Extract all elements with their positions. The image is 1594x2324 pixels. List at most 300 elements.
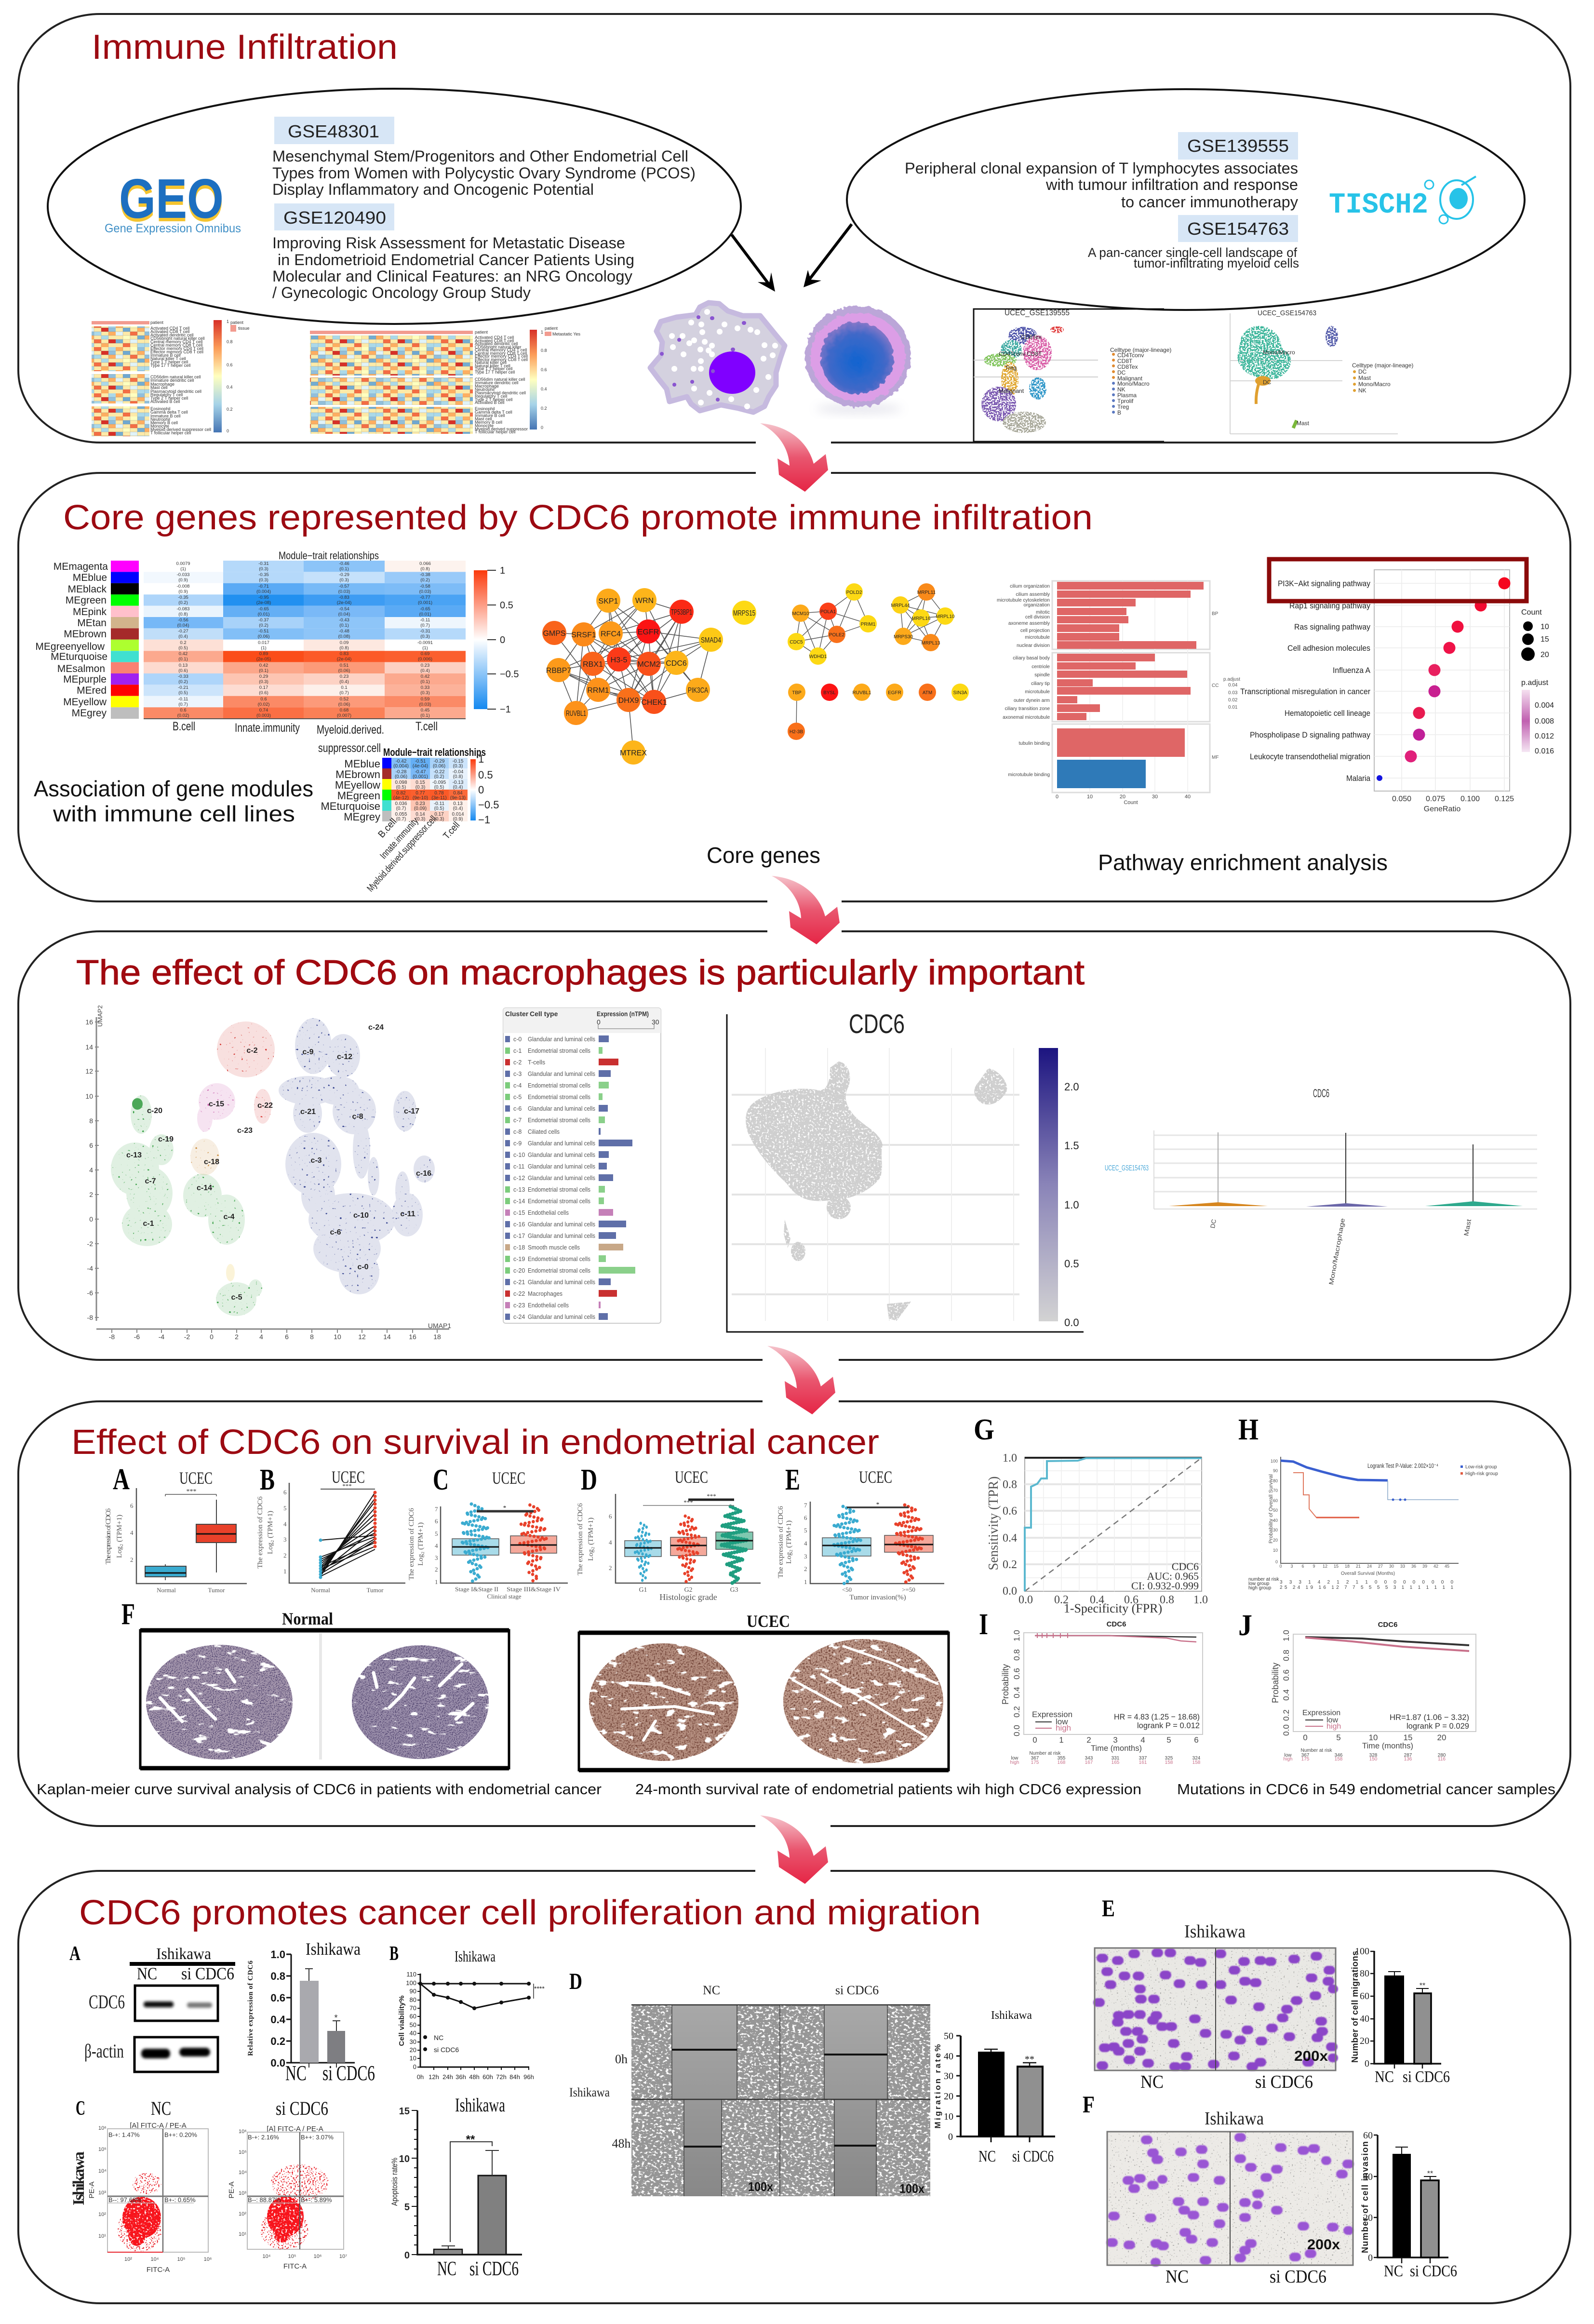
- UMAP: UCEC GSE139555: CD4Tconv: [1117, 352, 1144, 359]
- flow cytometry C: NC: [151, 2097, 171, 2119]
- flow cytometry C: 10⁵: [288, 2254, 296, 2259]
- dot plot: KEGG pathways: 10: [1540, 623, 1549, 631]
- heatmap: suppressor cell module-trait relationships: (0.09): [414, 806, 427, 811]
- bar chart: GO enrichment: cilium assembly: [1016, 592, 1050, 597]
- KM chart J: 0.2: [1282, 1709, 1291, 1721]
- flow cytometry C: 10²: [98, 2212, 106, 2217]
- heatmap: module-trait relationships: (0.8): [178, 612, 188, 617]
- bar chart: cell invasion: NC: [1384, 2262, 1403, 2280]
- network: core genes: SIN3A: [953, 690, 967, 696]
- UMAP: UCEC GSE154763: Mast: [1297, 420, 1310, 427]
- UMAP: clusters: c-3: [310, 1156, 322, 1165]
- heatmap: module-trait relationships: MEmagenta: [54, 561, 108, 572]
- bar chart: cell migrations: Number of cell migrations: [1350, 1951, 1360, 2063]
- heatmap: suppressor cell module-trait relationships: (9e-13): [450, 795, 466, 801]
- heatmap: GSE48301 immune infiltration: Type 17 T helper cell: [150, 363, 190, 368]
- dot plot: KEGG pathways: Leukocyte transendothelial migration: [1250, 752, 1370, 761]
- table: cluster cell types: c-1: [513, 1048, 522, 1054]
- bar chart: cell invasion: Number of cell invasion: [1360, 2141, 1370, 2253]
- line chart B: cell viability: 70: [410, 2004, 416, 2012]
- flow cytometry C: B++: 3.07%: [301, 2134, 334, 2141]
- dot plot: KEGG pathways: PI3K−Akt signaling pathway: [1278, 579, 1370, 588]
- dot plot: KEGG pathways: 0.008: [1535, 717, 1554, 725]
- table: cluster cell types: Glandular and luminal cells: [528, 1314, 595, 1320]
- heatmap: suppressor cell module-trait relationships: MEturquoise: [321, 800, 380, 812]
- KM chart I: 367: [1031, 1756, 1039, 1761]
- heatmap: module-trait relationships: MEblue: [73, 572, 107, 583]
- UMAP: UCEC GSE139555: Malignant: [1117, 375, 1143, 382]
- heatmap: GSE48301 immune infiltration: tissue: [238, 326, 250, 331]
- heatmap: module-trait relationships: (0.1): [420, 679, 430, 685]
- heatmap: module-trait relationships: (1): [261, 645, 267, 651]
- heatmap: GSE48301 immune infiltration: patient: [150, 320, 164, 325]
- violin plot: CDC6 by cell type: Mast: [1462, 1218, 1473, 1236]
- KM chart H: 42: [1433, 1564, 1438, 1569]
- heatmap: suppressor cell module-trait relationships: (0.7): [396, 817, 406, 822]
- heatmap: suppressor cell module-trait relationships: (9e-10): [413, 795, 428, 801]
- dataset tag GSE48301: [274, 117, 394, 144]
- arrow: panel 2 to panel 3: [767, 876, 842, 944]
- line chart B: cell viability: 96h: [523, 2073, 534, 2081]
- heatmap: GSE48301 immune infiltration: Effector memory CD4 T cell: [150, 346, 203, 351]
- bar chart: cell invasion: **: [1427, 2170, 1433, 2178]
- bar chart: GO enrichment: 40: [1185, 794, 1191, 800]
- heatmap: module-trait relationships: 0.45: [421, 708, 429, 713]
- bar chart: relative CDC6 expression: Relative expression of CDC6: [247, 1960, 255, 2056]
- flow cytometry C: 10⁶: [314, 2254, 321, 2259]
- table: cluster cell types: T-cells: [528, 1059, 545, 1066]
- heatmap: suppressor cell module-trait relationships: -0.42: [396, 759, 407, 764]
- heatmap: suppressor cell module-trait relationships: -0.095: [432, 780, 446, 785]
- flow cytometry C: si CDC6: [276, 2097, 328, 2119]
- table: cluster cell types: c-4: [513, 1082, 522, 1089]
- dot plot: KEGG pathways: [1240, 559, 1554, 813]
- flow cytometry C: 10²: [124, 2257, 132, 2262]
- bar chart: migration rate: 0: [948, 2132, 953, 2142]
- table: cluster cell types: Glandular and luminal cells: [528, 1279, 595, 1286]
- UMAP: clusters: 10: [85, 1092, 93, 1100]
- heatmap: module-trait relationships: -0.0091: [417, 640, 433, 645]
- transwell F: [1083, 2091, 1353, 2287]
- bar chart: GO enrichment: 0: [1056, 794, 1058, 800]
- heatmap: GSE120490 immune infiltration: [310, 326, 581, 434]
- heatmap: GSE120490 immune infiltration: Neutrophil: [475, 387, 495, 392]
- chart E: tumor invasion: *: [876, 1501, 879, 1508]
- heatmap: module-trait relationships: (2e-05): [256, 657, 271, 662]
- heatmap: module-trait relationships: -0.37: [258, 618, 269, 623]
- network: core genes: TBP: [792, 690, 802, 696]
- flow cytometry C: 10⁵: [239, 2149, 247, 2155]
- heatmap: module-trait relationships: MEturquoise: [51, 651, 107, 662]
- heatmap: suppressor cell module-trait relationships: (0.3): [415, 817, 425, 822]
- table: cluster cell types: c-0: [513, 1036, 522, 1043]
- heatmap: module-trait relationships: 0.17: [259, 685, 268, 690]
- bar chart: migration rate: [933, 2009, 1055, 2165]
- heatmap: module-trait relationships: (0.7): [339, 690, 349, 696]
- table: cluster cell types: Glandular and luminal cells: [528, 1163, 595, 1170]
- transwell E: si CDC6: [1255, 2072, 1313, 2092]
- heatmap: GSE48301 immune infiltration: Macrophage: [150, 382, 174, 387]
- feature plot: CDC6 expression: 2.0: [1064, 1081, 1079, 1093]
- heatmap: module-trait relationships: (0.02): [177, 713, 189, 718]
- heatmap: module-trait relationships: (0.03): [419, 589, 431, 594]
- heatmap: GSE48301 immune infiltration: Plasmacytoid dendritic cell: [150, 389, 201, 394]
- heatmap: suppressor cell module-trait relationships: -0.51: [415, 759, 426, 764]
- title: Effect of CDC6 on survival in endometrial cancer: [71, 1423, 879, 1462]
- bar chart: migration rate: Migration rate%: [933, 2044, 942, 2129]
- heatmap: module-trait relationships: (0.4): [178, 634, 188, 639]
- flow cytometry C: 10⁷: [339, 2254, 347, 2259]
- table: cluster cell types: Smooth muscle cells: [528, 1244, 580, 1251]
- UMAP: clusters: c-20: [147, 1107, 162, 1115]
- KM chart I: Expression: [1032, 1710, 1072, 1719]
- heatmap: module-trait relationships: 0.09: [340, 640, 348, 645]
- flow cytometry C: 10³: [98, 2190, 106, 2196]
- heatmap: GSE120490 immune infiltration: Eosinophil: [475, 406, 495, 411]
- UMAP: UCEC GSE154763: DC: [1358, 368, 1367, 375]
- ROC curve: 0.2: [1054, 1594, 1069, 1606]
- bar chart: apoptosis rate: **: [466, 2133, 475, 2146]
- violin plot: CDC6 by cell type: Mono/Macrophage: [1327, 1218, 1346, 1285]
- left dataset ellipse: [48, 89, 741, 324]
- bar chart: apoptosis rate: 15: [399, 2106, 410, 2117]
- GEO logo: GEO: [119, 171, 224, 233]
- bar chart: GO enrichment: cilium organization: [1010, 584, 1050, 589]
- bar chart: GO enrichment: axoneme assembly: [1008, 621, 1050, 626]
- UMAP: clusters: c-9: [302, 1048, 314, 1056]
- heatmap: GSE120490 immune infiltration: 0.2: [541, 406, 547, 411]
- dot plot: KEGG pathways: Cell adhesion molecules: [1287, 644, 1370, 653]
- table: cluster cell types: c-2: [513, 1059, 522, 1066]
- heatmap: module-trait relationships: MEgreenyellow: [35, 641, 105, 652]
- heatmap: suppressor cell module-trait relationships: MEbrown: [335, 768, 380, 780]
- KM chart I: high: [1056, 1723, 1071, 1733]
- heatmap: GSE120490 immune infiltration: Activated CD4 T cell: [475, 335, 514, 340]
- KM chart H: 12: [1323, 1564, 1327, 1569]
- network: core genes: PIK3CA: [688, 686, 708, 695]
- network: core genes: WDHD1: [809, 654, 827, 659]
- heatmap: module-trait relationships: -0.083: [177, 606, 189, 612]
- heatmap: module-trait relationships: (0.3): [420, 690, 430, 696]
- wound healing D: D: [569, 1969, 582, 1994]
- dot plot: KEGG pathways: Rap1 signaling pathway: [1289, 601, 1370, 610]
- table: cluster cell types: 30: [652, 1018, 659, 1026]
- heatmap: suppressor cell module-trait relationships: B.cell: [376, 816, 399, 840]
- heatmap: module-trait relationships: (0.04): [177, 623, 189, 628]
- bar chart: GO enrichment: MF: [1212, 755, 1219, 760]
- heatmap: module-trait relationships: (0.1): [259, 668, 268, 673]
- network: core genes: MRPS30: [894, 634, 913, 640]
- chart B: paired plot: UCEC: [332, 1467, 365, 1487]
- bar chart: relative CDC6 expression: 0.4: [270, 2014, 286, 2026]
- line chart B: cell viability: Cell viability%: [398, 1996, 406, 2046]
- flow cytometry C: 10⁵: [98, 2147, 107, 2152]
- table: cluster cell types: c-9: [513, 1140, 522, 1147]
- heatmap: module-trait relationships: 0.59: [421, 697, 429, 702]
- KM chart H: 90: [1273, 1468, 1278, 1473]
- heatmap: module-trait relationships: -0.46: [339, 561, 349, 566]
- KM chart I: 3: [1113, 1735, 1118, 1745]
- line chart B: cell viability: Ishikawa: [455, 1948, 496, 1965]
- dataset description GSE154763: tumor-infiltrating myeloid cells: [1134, 256, 1299, 270]
- KM chart H: 3: [1290, 1564, 1293, 1569]
- bar chart: relative CDC6 expression: Ishikawa: [306, 1939, 361, 1959]
- heatmap: module-trait relationships: MEpurple: [63, 674, 107, 685]
- table: cluster cell types: Endometrial stromal cells: [528, 1186, 590, 1193]
- network: core genes: H2-3B: [790, 729, 803, 735]
- letters G H I J: J: [1238, 1609, 1252, 1642]
- UMAP: clusters: -4: [87, 1264, 93, 1272]
- heatmap: module-trait relationships: (0.1): [178, 657, 188, 662]
- dataset description GSE120490: Improving Risk Assessment for Metastatic Disease: [272, 234, 625, 252]
- transwell E: 200x: [1294, 2048, 1328, 2064]
- UMAP: clusters: c-18: [204, 1158, 219, 1166]
- UMAP: clusters: c-7: [145, 1177, 156, 1185]
- chart A: tumor vs normal boxplot: Log₂ (TPM+1): [116, 1515, 123, 1558]
- network: core genes: RFC4: [601, 630, 621, 638]
- title: Immune Infiltration: [92, 28, 398, 67]
- UMAP: UCEC GSE139555: Tprolif: [1117, 398, 1134, 404]
- heatmap: module-trait relationships: -0.65: [420, 606, 430, 612]
- heatmap: GSE48301 immune infiltration: Gamma delta T cell: [150, 410, 188, 415]
- KM chart I: Probability: [1001, 1664, 1010, 1705]
- panel: core genes: [18, 473, 1570, 901]
- chart C: clinical stage: UCEC: [492, 1468, 525, 1488]
- heatmap: GSE48301 immune infiltration: Central memory CD8 T cell: [150, 343, 202, 348]
- flow cytometry C: 10⁶: [239, 2129, 247, 2135]
- chart D: histologic grade: UCEC: [675, 1467, 708, 1487]
- KM chart J: 15: [1404, 1733, 1412, 1742]
- KM chart J: Probability: [1271, 1663, 1280, 1703]
- KM chart J: CDC6: [1378, 1621, 1397, 1629]
- table: cluster cell types: Glandular and luminal cells: [528, 1221, 595, 1228]
- UMAP: clusters: -2: [87, 1240, 93, 1248]
- heatmap: suppressor cell module-trait relationships: Myeloid.derived.suppressor.cell: [365, 814, 439, 894]
- KM chart H: Overall Survival (Months): [1341, 1571, 1395, 1576]
- table: cluster cell types: c-21: [513, 1279, 525, 1286]
- KM chart I: 325: [1165, 1756, 1173, 1761]
- bar chart: cell migrations: 60: [1360, 1991, 1369, 2002]
- bar chart: relative CDC6 expression: 0.2: [270, 2035, 285, 2047]
- chart E: tumor invasion: The expression of CDC6: [777, 1506, 785, 1578]
- chart D: histologic grade: The expression of CDC6: [576, 1503, 584, 1575]
- KM chart I: CDC6: [1107, 1620, 1126, 1628]
- bar chart: GO enrichment: ciliary transition zone: [1005, 706, 1050, 712]
- KM chart H: 100: [1271, 1459, 1278, 1464]
- dot plot: KEGG pathways: 15: [1540, 635, 1549, 644]
- heatmap: suppressor cell module-trait relationships: (0.004): [393, 764, 409, 769]
- heatmap: GSE48301 immune infiltration: 0.8: [227, 339, 233, 344]
- heatmap: module-trait relationships: 0.29: [259, 674, 268, 679]
- KM chart J: [1271, 1621, 1476, 1762]
- transwell E: Ishikawa: [1184, 1921, 1246, 1942]
- feature plot: CDC6 expression: 1.0: [1064, 1199, 1079, 1211]
- bar chart: relative CDC6 expression: [247, 1939, 375, 2085]
- dot plot: KEGG pathways: 0.012: [1535, 732, 1554, 740]
- arrow: panel 4 to panel 5: [755, 1815, 830, 1884]
- heatmap: module-trait relationships: Module−trait relationships: [279, 550, 379, 562]
- heatmap: module-trait relationships: (0.2): [420, 578, 430, 583]
- IHC: normal tissue: F: [121, 1598, 135, 1631]
- heatmap: GSE48301 immune infiltration: 1: [227, 319, 229, 324]
- bar chart: relative CDC6 expression: 0.8: [270, 1970, 285, 1982]
- line chart B: cell viability: 0h: [417, 2073, 424, 2081]
- KM chart J: Time (months): [1362, 1741, 1413, 1750]
- dataset description GSE120490: in Endometrioid Endometrial Cancer Patients Using: [278, 251, 634, 269]
- bar chart: GO enrichment: 0.01: [1228, 705, 1238, 710]
- table: cluster cell types: Endometrial stromal cells: [528, 1094, 590, 1101]
- bar chart: cell migrations: 80: [1360, 1968, 1369, 1979]
- heatmap: GSE120490 immune infiltration: Monocyte: [475, 423, 494, 428]
- network: core genes: POLE2: [829, 632, 845, 638]
- ROC curve: 0.8: [1003, 1478, 1017, 1491]
- UMAP: clusters: 6: [285, 1333, 289, 1341]
- flow cytometry C: PE-A: [88, 2181, 96, 2199]
- dot plot: KEGG pathways: Malaria: [1346, 774, 1370, 783]
- bar chart: migration rate: **: [1025, 2054, 1034, 2065]
- line chart B: cell viability: 10: [410, 2055, 416, 2062]
- bar chart: apoptosis rate: Ishikawa: [455, 2094, 505, 2116]
- network: core genes: SRSF1: [571, 631, 596, 639]
- table: cluster cell types: Endometrial stromal cells: [528, 1198, 590, 1205]
- flow cytometry C: B+-: 5.89%: [301, 2196, 332, 2203]
- heatmap: module-trait relationships: -0.58: [420, 584, 430, 589]
- bar chart: cell migrations: 40: [1360, 2014, 1369, 2024]
- heatmap: module-trait relationships: -0.71: [258, 584, 269, 589]
- heatmap: module-trait relationships: -0.31: [258, 561, 269, 566]
- network: core genes: RBX1: [583, 660, 603, 669]
- network: core genes: MTREX: [620, 749, 647, 757]
- heatmap: GSE48301 immune infiltration: Type 1 T helper cell: [150, 360, 188, 364]
- KM chart I: 0.6: [1012, 1668, 1021, 1679]
- line chart B: cell viability: 0: [413, 2063, 416, 2070]
- network: core genes: RUVBL1: [853, 690, 871, 696]
- network: core genes: MCM2: [637, 660, 660, 669]
- table: cluster cell types: Cluster: [505, 1010, 529, 1018]
- flow cytometry C: B-+: 2.16%: [248, 2134, 279, 2141]
- UMAP: clusters: c-2: [246, 1047, 258, 1055]
- KM chart H: low group: [1248, 1581, 1270, 1586]
- transwell F: si CDC6: [1270, 2267, 1326, 2287]
- KM chart J: 175: [1301, 1757, 1310, 1762]
- transwell F: NC: [1165, 2267, 1189, 2287]
- chart D: histologic grade: Histologic grade: [659, 1592, 717, 1602]
- bar chart: cell migrations: NC: [1375, 2068, 1394, 2086]
- heatmap: module-trait relationships: (2e-04): [337, 600, 351, 605]
- table: cluster cell types: c-22: [513, 1290, 525, 1297]
- KM chart J: 287: [1404, 1753, 1412, 1758]
- heatmap: module-trait relationships: (0.9): [178, 578, 188, 583]
- heatmap: module-trait relationships: (0.1): [339, 566, 349, 572]
- dot plot: KEGG pathways: 0.016: [1535, 747, 1554, 755]
- table: cluster cell types: c-11: [513, 1163, 524, 1170]
- western blot A: [69, 1943, 235, 2072]
- heatmap: suppressor cell module-trait relationships: −0.5: [478, 799, 499, 811]
- heatmap: module-trait relationships: 0.52: [340, 697, 348, 702]
- chart E: tumor invasion: UCEC: [859, 1467, 892, 1487]
- bar chart: migration rate: 30: [944, 2071, 953, 2082]
- heatmap: suppressor cell module-trait relationships: (4e-04): [413, 764, 428, 769]
- bar chart: apoptosis rate: NC: [437, 2258, 456, 2280]
- flow cytometry C: 10⁴: [239, 2170, 247, 2176]
- dataset description GSE48301: Types from Women with Polycystic Ovary Syndrome (PCOS): [272, 164, 696, 182]
- violin plot: CDC6 by cell type: [1105, 1087, 1537, 1285]
- KM chart I: 0: [1032, 1735, 1037, 1745]
- chart D: histologic grade: G1: [639, 1586, 647, 1594]
- dot plot: KEGG pathways: 0.004: [1535, 701, 1554, 710]
- heatmap: suppressor cell module-trait relationships: [318, 741, 499, 894]
- heatmap: module-trait relationships: (1): [422, 645, 428, 651]
- heatmap: GSE48301 immune infiltration: Effector memory CD8 T cell: [150, 349, 203, 354]
- heatmap: GSE120490 immune infiltration: 0.8: [541, 348, 547, 353]
- KM chart I: 158: [1192, 1760, 1201, 1765]
- heatmap: GSE48301 immune infiltration: Eosinophil: [150, 406, 171, 411]
- network: core genes: SMAD4: [701, 636, 721, 645]
- dot plot: KEGG pathways: Count: [1521, 608, 1542, 617]
- letters G H I J: I: [979, 1608, 988, 1641]
- KM chart J: 158: [1335, 1757, 1343, 1762]
- UMAP: clusters: 0: [210, 1333, 214, 1341]
- heatmap: GSE48301 immune infiltration: CD56bright natural killer cell: [150, 336, 205, 341]
- chart C: clinical stage: *: [503, 1504, 506, 1511]
- KM chart I: 161: [1139, 1760, 1147, 1765]
- heatmap: suppressor cell module-trait relationships: 0.014: [452, 812, 464, 817]
- table: cluster cell types: Endometrial stromal cells: [528, 1256, 590, 1263]
- bar chart: migration rate: 50: [944, 2031, 953, 2042]
- heatmap: module-trait relationships: (0.2): [259, 623, 268, 628]
- KM chart J: 280: [1438, 1753, 1446, 1758]
- heatmap: suppressor cell module-trait relationships: -0.11: [434, 801, 444, 806]
- KM chart H: 20: [1273, 1538, 1278, 1543]
- heatmap: module-trait relationships: -0.48: [339, 629, 349, 634]
- heatmap: suppressor cell module-trait relationships: (0.4): [453, 785, 463, 790]
- KM chart J: 367: [1301, 1753, 1310, 1758]
- table: cluster cell types: Macrophages: [528, 1290, 563, 1297]
- chart D: histologic grade: 2: [609, 1564, 612, 1572]
- UMAP: clusters: c-10: [353, 1211, 369, 1220]
- chart C: clinical stage: 2: [435, 1566, 438, 1573]
- line chart B: cell viability: 12h: [429, 2073, 439, 2081]
- chart C: clinical stage: 7: [435, 1505, 438, 1513]
- KM chart H: [1248, 1457, 1498, 1591]
- bar chart: GO enrichment: cell projection: [1020, 628, 1050, 633]
- captions row: Kaplan-meier curve survival analysis of CDC6 in patients with endometrial cancer: [37, 1781, 602, 1798]
- panel: survival: [18, 1401, 1570, 1826]
- feature plot: CDC6 expression: 1.5: [1064, 1140, 1079, 1152]
- transwell E: [1095, 1894, 1336, 2092]
- heatmap: module-trait relationships: (0.007): [337, 713, 351, 718]
- bar chart: relative CDC6 expression: 1.0: [270, 1948, 285, 1961]
- KM chart I: 1: [1059, 1735, 1064, 1745]
- bar chart: GO enrichment: organization: [1024, 603, 1050, 608]
- heatmap: GSE48301 immune infiltration: Immature B cell: [150, 414, 181, 418]
- dataset description GSE120490: [272, 234, 634, 301]
- bar chart: GO enrichment: 30: [1152, 794, 1158, 800]
- chart D: histologic grade: G3: [730, 1586, 738, 1594]
- UMAP: clusters: c-5: [231, 1293, 242, 1302]
- heatmap: suppressor cell module-trait relationships: (0.3): [453, 764, 463, 769]
- ROC curve: AUC: 0.965: [1147, 1570, 1199, 1582]
- heatmap: suppressor cell module-trait relationships: -0.22: [434, 769, 445, 775]
- heatmap: module-trait relationships: -0.33: [178, 674, 188, 679]
- heatmap: suppressor cell module-trait relationships: Innate.immunity: [378, 816, 420, 861]
- dataset description GSE154763: A pan-cancer single-cell landscape of: [1088, 245, 1297, 260]
- bar chart: GO enrichment: ciliary basal body: [1013, 656, 1050, 661]
- table: cluster cell types: Endometrial stromal cells: [528, 1117, 590, 1124]
- KM chart J: 0.4: [1282, 1689, 1291, 1701]
- heatmap: module-trait relationships: (0.8): [339, 645, 349, 651]
- UMAP: clusters: 0: [89, 1215, 93, 1223]
